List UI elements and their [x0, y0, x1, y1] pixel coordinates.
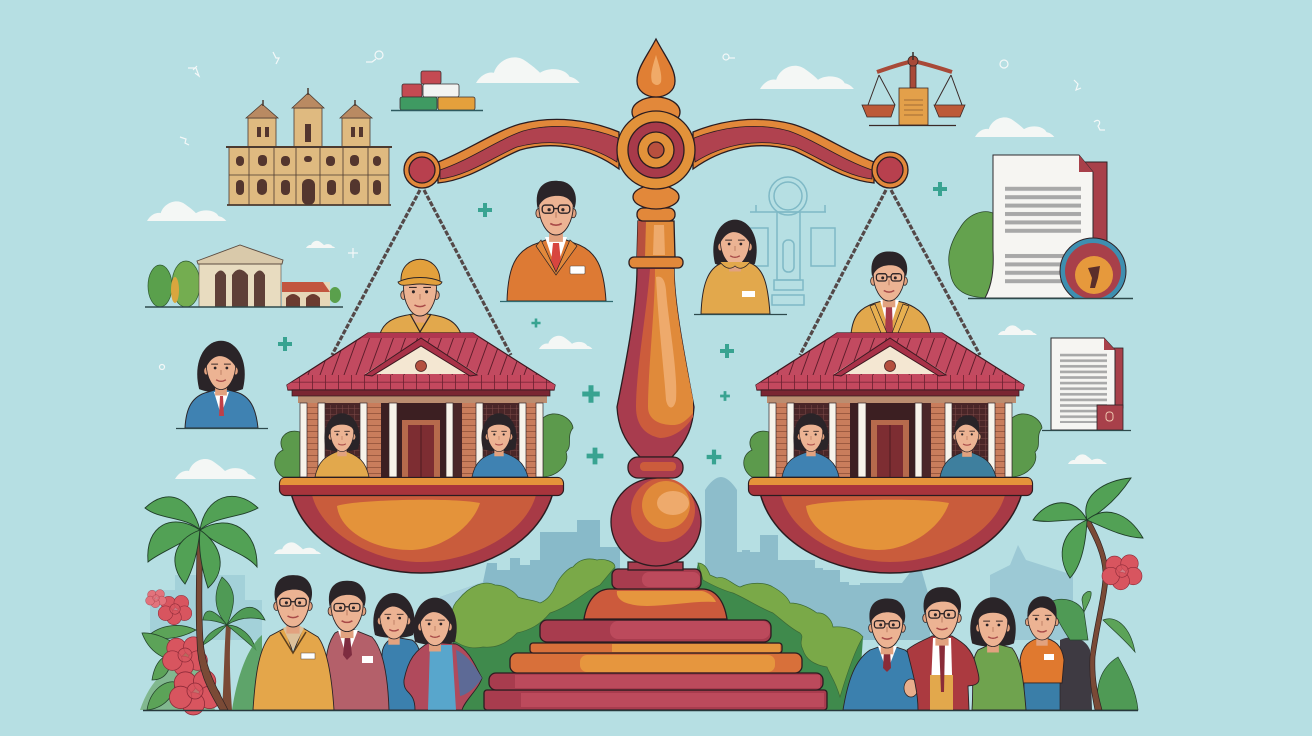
person: orange shirt woman: [1020, 596, 1064, 710]
column upper shaft and vase: [611, 185, 701, 570]
ground line: [143, 710, 1138, 712]
center disc: [617, 111, 695, 189]
person: mauve waistcoat man: [325, 581, 389, 710]
left courthouse: [275, 333, 573, 477]
decorative small white glyphs: [160, 51, 1105, 370]
icon: ghost outline scale: [750, 177, 835, 305]
person: hard hat worker: [380, 259, 461, 334]
skyline silhouettes: [150, 477, 1073, 640]
icon: small balance scale: [862, 52, 965, 126]
central column of the scale: [404, 39, 908, 710]
group of people: bottom right: [843, 587, 1064, 710]
right courthouse: [744, 333, 1042, 477]
plus signs: [278, 182, 947, 464]
group of people: bottom left: [253, 575, 482, 710]
beam end caps: [404, 152, 908, 188]
icon: small document with lock: [1042, 338, 1131, 430]
person: blue suit man: [843, 599, 928, 710]
person: red blazer man: [907, 587, 979, 710]
icon: document with seal and bush: [949, 155, 1140, 328]
person: yellow sweater man: [253, 575, 334, 710]
bushes behind the base: [451, 559, 863, 710]
person: yellow sweater woman: [694, 220, 787, 314]
person: blue shirt woman: [373, 593, 422, 710]
right palm tree and plants: [1033, 478, 1143, 710]
clouds: [147, 57, 1107, 554]
left pan: [280, 478, 564, 573]
icon: columned hall with trees: [145, 245, 343, 307]
person: green sweater woman: [970, 597, 1026, 710]
chains: [332, 190, 980, 355]
people in left courthouse: [315, 413, 528, 477]
beam right: [693, 119, 874, 183]
right pan: [748, 478, 1032, 573]
icon: church building: [226, 88, 392, 205]
beam left: [438, 119, 619, 183]
person: yellow suit on right roof: [851, 252, 931, 334]
person: blue suit woman: [176, 341, 268, 428]
icon: stacked bricks: [391, 71, 483, 110]
base steps: [484, 569, 827, 710]
finial: [632, 39, 680, 127]
left palm tree and flowers: [140, 496, 265, 715]
person: woman in patterned jacket: [404, 598, 482, 710]
people in right courthouse: [782, 413, 996, 477]
person: orange suit: [500, 181, 613, 302]
